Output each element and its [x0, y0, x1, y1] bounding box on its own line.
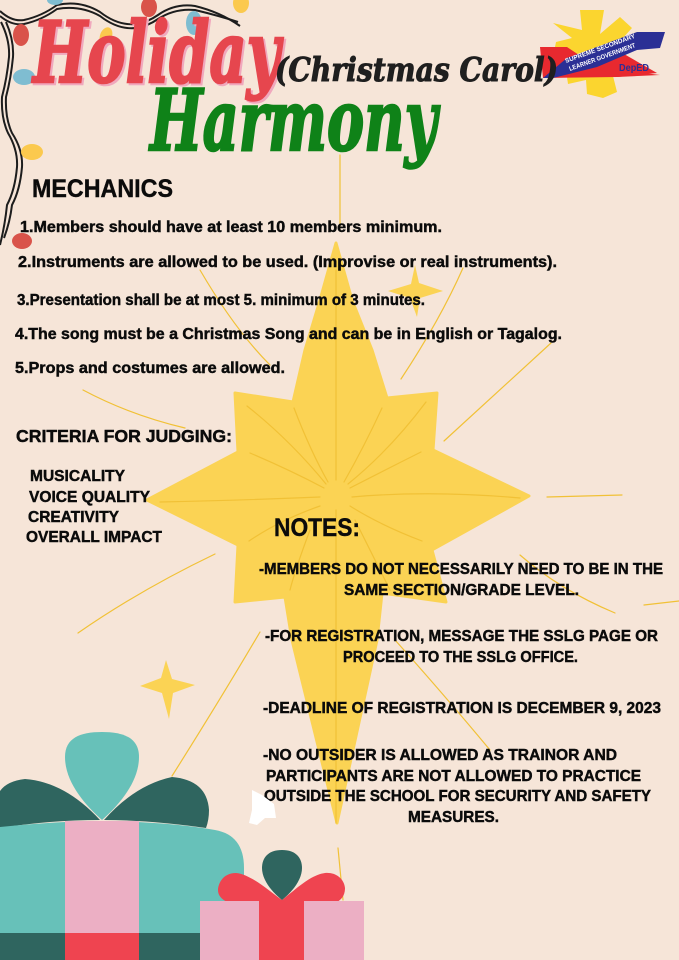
rule 3: 3.Presentation shall be at most 5. minimum of 3 minutes. [17, 292, 425, 309]
icon: large gift [0, 732, 244, 960]
background star with rays [78, 155, 679, 900]
bulb [186, 11, 202, 35]
icon: small gift [200, 850, 364, 960]
criterion: overall impact: OVERALL IMPACT [26, 529, 163, 546]
bulb [12, 233, 32, 249]
rule 1: 1.Members should have at least 10 members minimum. [20, 219, 442, 236]
bulb [47, 0, 63, 5]
bulb [13, 24, 29, 46]
note 1: -MEMBERS DO NOT NECESSARILY NEED TO BE IN THE [259, 561, 663, 578]
heading: criteria for judging: CRITERIA FOR JUDGING: [16, 426, 232, 446]
title: Harmony: Harmony [149, 71, 440, 170]
logo: SSLG sun and banner [540, 10, 665, 98]
heading: mechanics: MECHANICS [32, 175, 173, 203]
note 1: SAME SECTION/GRADE LEVEL. [344, 582, 579, 599]
bulb [141, 0, 157, 17]
heading: notes: NOTES: [274, 514, 360, 542]
bulb [97, 25, 115, 47]
logo: SSLG sun and banner: LEARNER GOVERNMENT [568, 42, 636, 73]
logo: SSLG sun and banner: SUPREME SECONDARY [564, 33, 637, 65]
bulb [21, 144, 43, 160]
note 2: -FOR REGISTRATION, MESSAGE THE SSLG PAGE OR [265, 628, 658, 645]
decorative sparkle: lower left [140, 660, 195, 719]
rule 2: 2.Instruments are allowed to be used. (Improvise or real instruments). [18, 254, 557, 271]
note 3: -DEADLINE OF REGISTRATION IS DECEMBER 9, 2023 [263, 700, 661, 717]
note 4: -NO OUTSIDER IS ALLOWED AS TRAINOR AND [263, 747, 617, 764]
note 4 [263, 747, 652, 826]
note 2 [265, 628, 658, 666]
rule 4: 4.The song must be a Christmas Song and can be in English or Tagalog. [15, 326, 562, 343]
note 1 [259, 561, 663, 599]
criteria list [26, 468, 163, 546]
title: Holiday foreground: Holiday [32, 3, 284, 102]
note 4: MEASURES. [408, 809, 499, 826]
title: Holiday shadow: Holiday [34, 5, 286, 104]
note 4: PARTICIPANTS ARE NOT ALLOWED TO PRACTICE [266, 768, 641, 785]
white smudge [249, 790, 276, 825]
logo: SSLG sun and banner: DepED [619, 63, 649, 74]
bulb [233, 0, 249, 13]
note 2: PROCEED TO THE SSLG OFFICE. [343, 649, 578, 666]
criterion: musicality: MUSICALITY [30, 468, 126, 485]
string lights [0, 0, 249, 249]
decorative sparkle: upper right [388, 265, 443, 317]
notes list [259, 561, 663, 826]
criterion: voice quality: VOICE QUALITY [29, 489, 151, 506]
mechanics list [15, 219, 562, 377]
rule 5: 5.Props and costumes are allowed. [15, 360, 285, 377]
criterion: creativity: CREATIVITY [28, 509, 120, 526]
subtitle: Christmas Carol: (Christmas Carol) [275, 50, 558, 89]
bulb [13, 69, 35, 85]
note 4: OUTSIDE THE SCHOOL FOR SECURITY AND SAFETY [264, 788, 652, 805]
